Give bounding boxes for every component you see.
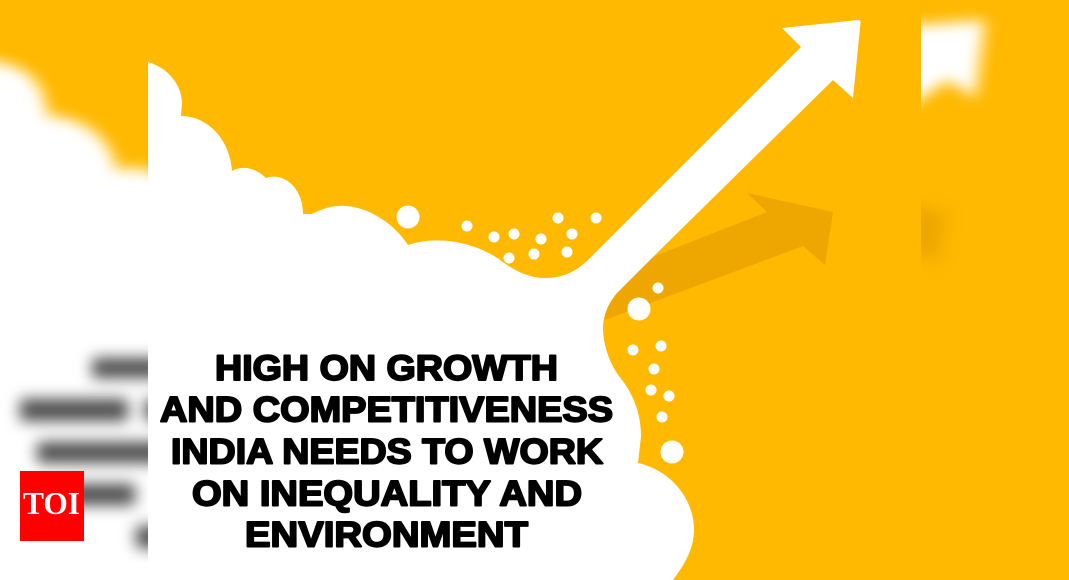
headline: HIGH ON GROWTH: [215, 348, 558, 388]
TOI logo: [20, 471, 84, 541]
headline: [160, 348, 613, 554]
headline: ON INEQUALITY AND: [192, 474, 582, 514]
darker secondary arrow: [600, 193, 833, 320]
bubbles: [396, 206, 684, 464]
blurred headline text: [20, 358, 167, 548]
headline: INDIA NEEDS TO WORK: [171, 432, 603, 472]
headline: AND COMPETITIVENESS: [160, 390, 613, 430]
headline: ENVIRONMENT: [245, 514, 528, 554]
TOI logo: TOI: [23, 485, 80, 521]
main panel: [148, 20, 861, 580]
white fill of the left backdrop: [0, 568, 148, 580]
white cloud with rising arrow: [148, 20, 861, 580]
